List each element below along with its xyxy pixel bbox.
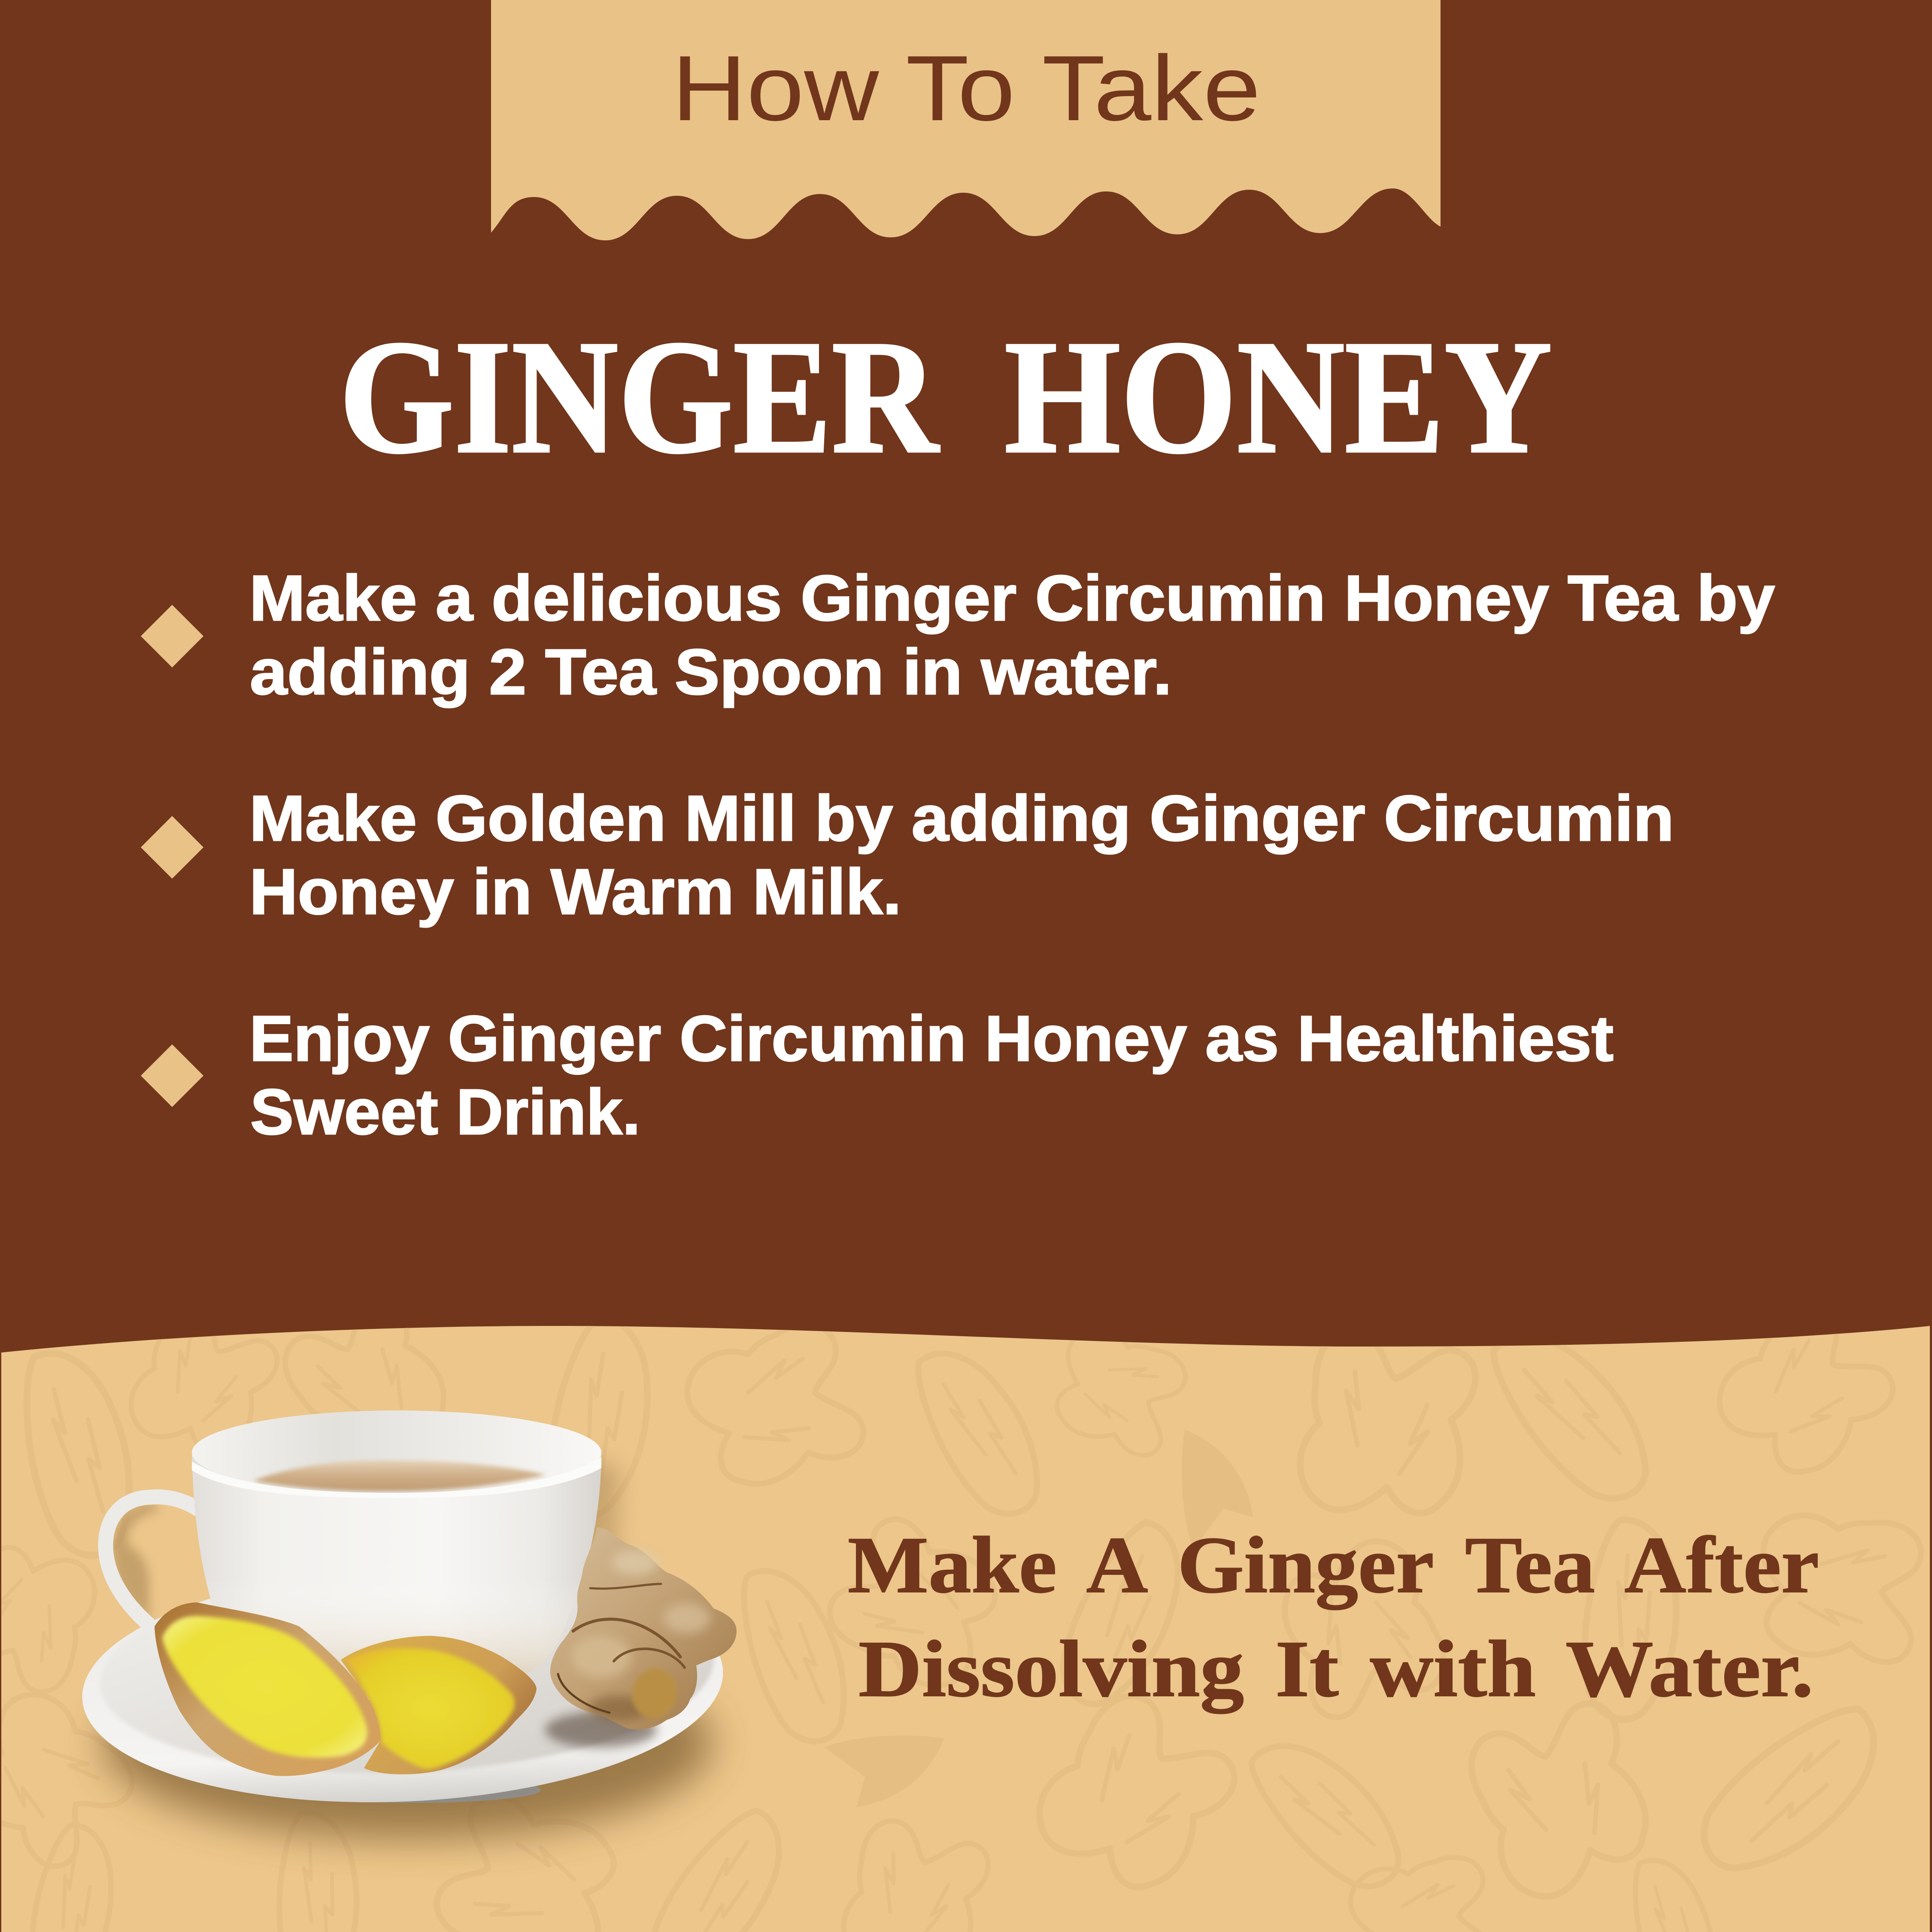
illustration: tea cup with ginger on saucer — [77, 1410, 737, 1839]
whole ginger root — [550, 1527, 737, 1729]
item 1 text: adding 2 Tea Spoon in water. — [250, 636, 1172, 708]
tea surface — [253, 1460, 546, 1491]
root skin folds — [558, 1584, 685, 1713]
item 1 text — [249, 562, 1775, 708]
title: ginger honey: GINGER — [339, 306, 940, 487]
handle hole shadow — [112, 1502, 159, 1623]
ginger slice left — [155, 1602, 380, 1776]
cup front lip — [192, 1457, 601, 1498]
list item 2 — [141, 782, 1674, 928]
caption: make a ginger tea: Dissolving It with Water. — [858, 1624, 1814, 1714]
banner shape with wavy edge — [491, 0, 1441, 240]
item 2 text: Honey in Warm Milk. — [249, 855, 901, 928]
item 1 text: Make a delicious Ginger Circumin Honey Tea by — [249, 562, 1775, 634]
saucer foot — [283, 1777, 541, 1803]
saucer — [77, 1554, 728, 1815]
item 2 text: Make Golden Mill by adding Ginger Circumin — [249, 782, 1674, 854]
list item 3 — [141, 1002, 1614, 1148]
root mottling — [571, 1550, 710, 1721]
banner text: How To Take — [672, 36, 1261, 140]
item 3 text: Sweet Drink. — [250, 1076, 640, 1148]
cup handle — [106, 1497, 197, 1631]
caption: make a ginger tea — [848, 1520, 1819, 1714]
cup shadow — [507, 1459, 620, 1695]
banner: how to take — [491, 0, 1441, 240]
list item 1 — [141, 562, 1775, 708]
ginger slice right — [341, 1636, 537, 1774]
saucer rim — [77, 1554, 728, 1815]
item 2 text — [249, 782, 1674, 928]
icon: diamond bullet — [141, 816, 203, 879]
caption: make a ginger tea: Make A Ginger Tea After — [848, 1520, 1819, 1610]
item 3 text: Enjoy Ginger Circumin Honey as Healthiest — [249, 1002, 1614, 1074]
root shadow on saucer — [545, 1712, 657, 1748]
icon: diamond bullet — [141, 605, 203, 667]
root cut end — [627, 1664, 682, 1723]
saucer well — [96, 1558, 718, 1786]
icon: diamond bullet — [141, 1044, 203, 1107]
title: ginger honey — [339, 306, 1552, 487]
item 3 text — [249, 1002, 1614, 1148]
cup body — [192, 1410, 601, 1680]
cup rim and inner wall — [192, 1410, 601, 1495]
title: ginger honey: HONEY — [1004, 306, 1552, 487]
saucer shadow — [103, 1646, 713, 1839]
panel: bottom beige with ginger pattern — [0, 1287, 1932, 1932]
